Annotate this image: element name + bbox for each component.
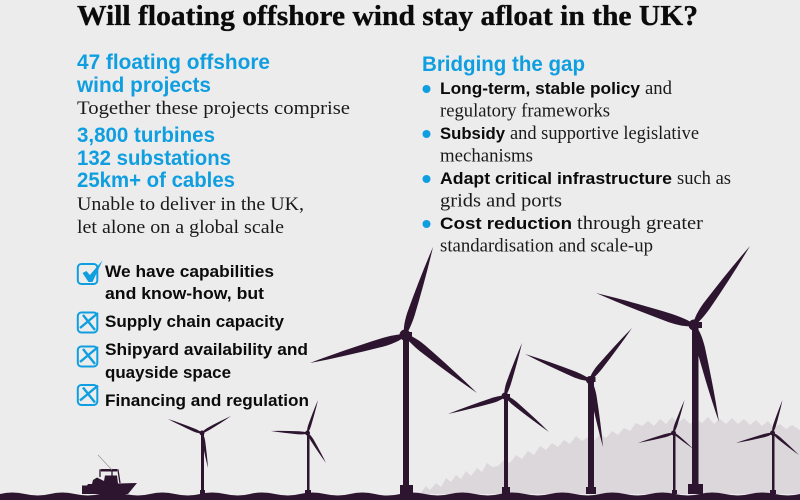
bullet: cost reduction <box>422 213 704 256</box>
forest silhouette <box>420 417 800 494</box>
figures: turbines, substations, cables: 3,800 turbines <box>77 124 215 147</box>
text: supply chain capacity: Supply chain capacity <box>105 313 285 331</box>
panel: capabilities checklist <box>78 260 309 410</box>
bullet: cost reduction: through greater <box>577 213 704 234</box>
turbine 4 <box>594 243 753 494</box>
panel: bridging the gap <box>422 53 731 256</box>
heading: bridging the gap: Bridging the gap <box>422 53 585 76</box>
bullet: subsidy: Subsidy <box>440 125 506 143</box>
figures: turbines, substations, cables <box>77 124 235 192</box>
bullet: subsidy <box>422 123 699 166</box>
icon: boat <box>82 455 137 494</box>
text: shipyard availability: quayside space <box>105 364 231 382</box>
icon: blue tick box <box>78 260 102 284</box>
turbine 2 <box>447 342 551 494</box>
text: unable to deliver: Unable to deliver in the UK, <box>77 194 304 215</box>
turbine 8 <box>271 399 328 494</box>
turbine 7 <box>167 415 232 494</box>
heading: 47 floating offshore wind projects <box>76 51 270 97</box>
bullet: subsidy: and supportive legislative <box>510 123 699 144</box>
bullet: long-term policy <box>422 78 672 122</box>
text: we have capabilities: and know-how, but <box>105 285 265 303</box>
bullet: adapt infrastructure: such as <box>677 168 731 189</box>
title: Will floating offshore wind stay afloat in the UK? <box>77 0 698 32</box>
heading: 47 floating offshore wind projects: wind projects <box>76 74 211 97</box>
turbine 1 <box>309 246 480 494</box>
turbine 3 <box>524 326 634 494</box>
bullet: cost reduction: Cost reduction <box>440 215 572 233</box>
text: together these projects comprise: Together these projects comprise <box>77 98 350 119</box>
wind turbines <box>167 243 800 494</box>
text: financing and regulation: Financing and regulation <box>105 392 309 410</box>
figures: turbines, substations, cables: 132 substations <box>77 147 231 170</box>
sea <box>0 492 800 500</box>
bullet: adapt infrastructure <box>422 168 731 212</box>
bullet: long-term policy: and <box>645 78 672 99</box>
bullet: adapt infrastructure: grids and ports <box>440 190 562 212</box>
icon: blue cross box <box>78 312 98 332</box>
panel: project statistics <box>76 51 350 238</box>
bullet: cost reduction: standardisation and scale-up <box>440 236 653 256</box>
text: unable to deliver: let alone on a global scale <box>77 217 284 238</box>
text: shipyard availability <box>105 341 308 382</box>
turbine 5 <box>638 399 694 494</box>
text: shipyard availability: Shipyard availability and <box>105 341 308 359</box>
heading: 47 floating offshore wind projects: 47 floating offshore <box>77 51 270 74</box>
text: unable to deliver <box>77 194 304 238</box>
figures: turbines, substations, cables: 25km+ of cables <box>77 169 235 192</box>
text: we have capabilities: We have capabilities <box>105 263 274 281</box>
icon: blue cross box <box>78 346 98 366</box>
bullet: subsidy: mechanisms <box>440 146 533 166</box>
icon: blue cross box <box>78 385 98 405</box>
turbine 6 <box>736 400 800 494</box>
bullet: long-term policy: Long-term, stable policy <box>440 80 641 98</box>
bullet: adapt infrastructure: Adapt critical infrastructure <box>440 170 672 188</box>
bullet: long-term policy: regulatory frameworks <box>440 100 610 122</box>
text: we have capabilities <box>105 263 274 303</box>
